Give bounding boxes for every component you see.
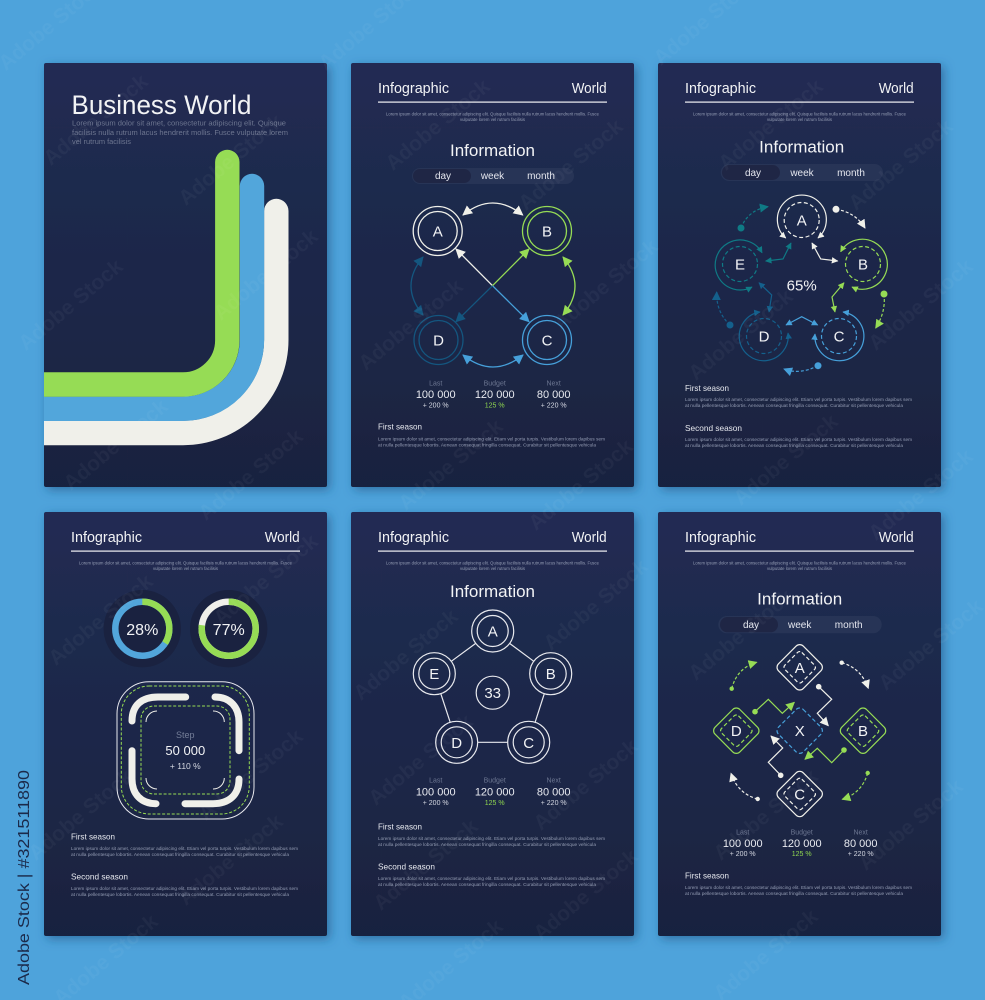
- second season text: [378, 862, 606, 887]
- diamond A: A: [795, 660, 805, 677]
- diamond B: B: [858, 723, 868, 740]
- watermarks: Adobe Stock: [549, 235, 663, 335]
- stats: Last: [736, 829, 749, 836]
- watermarks: Adobe Stock: [209, 530, 323, 630]
- second season text: Second season: [71, 872, 128, 882]
- diamond D: D: [731, 723, 742, 740]
- node A: [413, 206, 462, 256]
- stock id side text: Adobe Stock | #321511890: [16, 770, 33, 985]
- node C: [815, 312, 864, 361]
- watermarks: Adobe Stock: [524, 435, 638, 535]
- first season text: at nulla pellentesque lobortis. Aenean consequat fringilla consequat. Curabitur sit pellentesque vehicula: [685, 403, 904, 408]
- watermarks: Adobe Stock: [209, 225, 323, 325]
- stats: [416, 778, 571, 807]
- watermarks: Adobe Stock: [684, 585, 798, 685]
- watermarks: Adobe Stock: [874, 595, 985, 695]
- step frame: 50 000: [165, 743, 205, 758]
- stats: Next: [546, 381, 561, 388]
- node E: E: [735, 256, 745, 274]
- curved colour bands: [20, 162, 276, 433]
- diamond A: [775, 643, 824, 692]
- stats: 100 000: [416, 787, 456, 799]
- stats: + 220 %: [848, 851, 874, 858]
- step frame: Step: [176, 730, 195, 740]
- page header: World: [879, 81, 914, 97]
- diamond C: [775, 769, 824, 819]
- stats: 100 000: [416, 389, 456, 401]
- watermarks: Adobe Stock: [369, 815, 483, 915]
- outer dashed arrows: [717, 206, 888, 371]
- cover text block: Lorem ipsum dolor sit amet, consectetur adipiscing elit. Quisque: [72, 120, 286, 128]
- stats: + 200 %: [730, 851, 756, 858]
- page header: Infographic: [378, 530, 449, 546]
- second season text: at nulla pellentesque lobortis. Aenean consequat fringilla consequat. Curabitur sit pellentesque vehicula: [685, 443, 904, 448]
- cover text block: [72, 120, 288, 146]
- node C: C: [523, 735, 534, 752]
- stats: 120 000: [475, 389, 515, 401]
- first season text: at nulla pellentesque lobortis. Aenean consequat fringilla consequat. Curabitur sit pellentesque vehicula: [71, 852, 290, 857]
- watermarks: Adobe Stock: [684, 285, 798, 385]
- stats: 80 000: [537, 787, 571, 799]
- watermarks: Adobe Stock: [729, 410, 843, 510]
- watermarks: Adobe Stock: [709, 765, 823, 865]
- first season text: at nulla pellentesque lobortis. Aenean consequat fringilla consequat. Curabitur sit pellentesque vehicula: [685, 891, 904, 896]
- diamond D: [712, 706, 761, 755]
- node D: D: [433, 332, 444, 350]
- second season text: at nulla pellentesque lobortis. Aenean consequat fringilla consequat. Curabitur sit pellentesque vehicula: [71, 892, 290, 897]
- node B: B: [858, 256, 868, 274]
- day week month tabs: week: [787, 620, 812, 631]
- cover text block: vel rutrum facilisis: [72, 139, 132, 146]
- page header: [71, 530, 300, 571]
- donut 77%: 77%: [213, 622, 245, 639]
- day week month tabs: [412, 168, 574, 184]
- first season text: Lorem ipsum dolor sit amet, consectetur adipiscing elit. Etiam vel porta turpis. Vestibulum lorem dapibus sem: [685, 885, 913, 890]
- node D: [436, 721, 478, 763]
- watermarks: Adobe Stock: [14, 255, 128, 355]
- stats: 125 %: [792, 851, 812, 858]
- watermarks: Adobe Stock: [39, 70, 153, 170]
- stats: 120 000: [782, 838, 822, 850]
- first season text: First season: [71, 832, 115, 842]
- node B: [841, 239, 887, 289]
- second season text: Lorem ipsum dolor sit amet, consectetur adipiscing elit. Etiam vel porta turpis. Vestibulum lorem dapibus sem: [378, 876, 606, 881]
- heading: Information: [759, 138, 844, 157]
- watermarks: Adobe Stock: [394, 415, 508, 515]
- first season text: at nulla pellentesque lobortis. Aenean consequat fringilla consequat. Curabitur sit pellentesque vehicula: [378, 842, 597, 847]
- page header: [378, 81, 607, 122]
- watermarks: Adobe Stock: [349, 605, 463, 705]
- donut 77%: [190, 590, 267, 667]
- node D: [739, 312, 788, 361]
- page header: Lorem ipsum dolor sit amet, consectetur adipiscing elit. Quisque facilisis nulla rutrum lacus hendrerit mollis. Fusce: [386, 112, 600, 116]
- stats: 125 %: [485, 403, 505, 410]
- donut 28%: [104, 590, 181, 667]
- watermarks: Adobe Stock: [864, 445, 978, 545]
- step frame: [117, 682, 254, 819]
- page header: vulputate lorem vel rutrum facilisis: [153, 566, 218, 571]
- first season text: [71, 832, 299, 857]
- stats: Budget: [484, 381, 506, 388]
- node A: A: [433, 224, 443, 240]
- day week month tabs: day: [745, 168, 761, 179]
- first season text: First season: [685, 870, 729, 880]
- node C: [508, 721, 550, 763]
- node A: A: [488, 624, 498, 640]
- day week month tabs: week: [789, 168, 815, 179]
- watermarks: Adobe Stock: [174, 110, 288, 210]
- day week month tabs: month: [527, 171, 555, 182]
- page header: [378, 530, 607, 571]
- arrows between circles: [411, 203, 575, 367]
- page header: Infographic: [71, 530, 142, 546]
- stats: 80 000: [537, 389, 571, 401]
- panel: cover Business World: [20, 63, 327, 487]
- panel: diamond diagram: [658, 512, 941, 936]
- stats: Next: [546, 778, 561, 785]
- stats: + 220 %: [541, 403, 567, 410]
- day week month tabs: week: [480, 171, 505, 182]
- node B: [522, 206, 572, 256]
- stats: [416, 381, 571, 410]
- outer dashed arrows: [730, 660, 870, 801]
- diamond X: X: [795, 723, 805, 740]
- cover text block: facilisis nulla rutrum lacus hendrerit mollis. Fusce vulputate lorem: [72, 130, 288, 137]
- panel: pentagon diagram: [351, 512, 634, 936]
- stats: 100 000: [723, 838, 763, 850]
- page header: [685, 530, 914, 571]
- centre percentage: 65%: [787, 278, 817, 294]
- page header: Infographic: [378, 81, 449, 97]
- node C: [522, 316, 572, 364]
- cover title: Business World: [72, 90, 252, 120]
- watermarks: Adobe Stock: [529, 845, 643, 945]
- diamond X: [775, 706, 824, 755]
- node E: [413, 653, 455, 695]
- first season text: Lorem ipsum dolor sit amet, consectetur adipiscing elit. Etiam vel porta turpis. Vestibulum lorem dapibus sem: [71, 846, 299, 851]
- watermarks: Adobe Stock: [381, 75, 495, 175]
- second season text: [71, 872, 299, 897]
- stats: + 200 %: [423, 800, 449, 807]
- step frame: + 110 %: [170, 761, 201, 771]
- node E: [715, 240, 762, 290]
- page header: vulputate lorem vel rutrum facilisis: [460, 117, 525, 122]
- first season text: First season: [378, 822, 422, 832]
- page header: World: [572, 81, 607, 97]
- watermarks: Adobe Stock: [354, 275, 468, 375]
- stats: 120 000: [475, 787, 515, 799]
- node C: C: [834, 328, 845, 346]
- first season text: First season: [378, 422, 422, 432]
- page header: Infographic: [685, 530, 756, 546]
- page header: Lorem ipsum dolor sit amet, consectetur adipiscing elit. Quisque facilisis nulla rutrum lacus hendrerit mollis. Fusce: [386, 560, 600, 566]
- page header: Infographic: [685, 81, 756, 97]
- first season text: at nulla pellentesque lobortis. Aenean consequat fringilla consequat. Curabitur sit pellentesque vehicula: [378, 443, 597, 448]
- first season text: Lorem ipsum dolor sit amet, consectetur adipiscing elit. Etiam vel porta turpis. Vestibulum lorem dapibus sem: [685, 397, 913, 402]
- first season text: [378, 422, 606, 448]
- second season text: Second season: [685, 423, 742, 433]
- node B: [530, 653, 572, 695]
- first season text: [685, 870, 913, 896]
- day week month tabs: month: [835, 620, 863, 631]
- pentagon links: [441, 643, 544, 742]
- second season text: Lorem ipsum dolor sit amet, consectetur adipiscing elit. Etiam vel porta turpis. Vestibulum lorem dapibus sem: [685, 437, 913, 442]
- node D: D: [759, 328, 770, 346]
- panel: five circle cycle: [658, 63, 941, 487]
- watermarks: Adobe Stock: [194, 425, 308, 525]
- page header: Lorem ipsum dolor sit amet, consectetur adipiscing elit. Quisque facilisis nulla rutrum lacus hendrerit mollis. Fusce: [79, 560, 293, 566]
- first season text: Lorem ipsum dolor sit amet, consectetur adipiscing elit. Etiam vel porta turpis. Vestibulum lorem dapibus sem: [378, 836, 606, 841]
- node B: B: [542, 224, 552, 240]
- heading: Information: [450, 582, 535, 601]
- stats: Next: [853, 829, 868, 836]
- first season text: [378, 822, 606, 847]
- node B: B: [546, 666, 556, 683]
- node D: D: [451, 735, 462, 752]
- panel: donuts and step frame: [44, 512, 327, 936]
- second season text: [685, 423, 913, 448]
- watermarks: Adobe Stock: [714, 75, 828, 175]
- page header: vulputate lorem vel rutrum facilisis: [767, 566, 832, 571]
- panel: four circle diagram: [351, 63, 634, 487]
- watermarks: Adobe Stock: [364, 710, 478, 810]
- day week month tabs: day: [743, 620, 759, 631]
- node C: C: [542, 332, 553, 350]
- second season text: Lorem ipsum dolor sit amet, consectetur adipiscing elit. Etiam vel porta turpis. Vestibulum lorem dapibus sem: [71, 886, 299, 891]
- stats: 125 %: [485, 800, 505, 807]
- stats: Last: [429, 381, 442, 388]
- page header: vulputate lorem vel rutrum facilisis: [460, 566, 525, 571]
- watermarks: Adobe Stock: [194, 725, 308, 825]
- stats: + 220 %: [541, 800, 567, 807]
- page header: World: [572, 530, 607, 546]
- page header: [685, 81, 914, 122]
- stats: Budget: [791, 829, 813, 836]
- node A: A: [797, 212, 807, 230]
- centre value: [476, 676, 509, 709]
- page header: vulputate lorem vel rutrum facilisis: [767, 117, 832, 122]
- day week month tabs: day: [435, 171, 451, 182]
- heading: Information: [450, 141, 535, 160]
- second season text: Second season: [378, 862, 435, 872]
- page header: Lorem ipsum dolor sit amet, consectetur adipiscing elit. Quisque facilisis nulla rutrum lacus hendrerit mollis. Fusce: [693, 112, 907, 116]
- watermarks: Adobe Stock: [59, 395, 173, 495]
- stats: [723, 829, 878, 858]
- heading: Information: [757, 589, 842, 608]
- day week month tabs: month: [837, 168, 865, 179]
- first season text: First season: [685, 383, 729, 393]
- day week month tabs: [721, 164, 883, 181]
- watermarks: Adobe Stock: [529, 735, 643, 835]
- stats: + 200 %: [423, 403, 449, 410]
- watermarks: Adobe Stock: [864, 255, 978, 355]
- day week month tabs: [718, 616, 882, 633]
- page header: Lorem ipsum dolor sit amet, consectetur adipiscing elit. Quisque facilisis nulla rutrum lacus hendrerit mollis. Fusce: [693, 560, 907, 566]
- second season text: at nulla pellentesque lobortis. Aenean consequat fringilla consequat. Curabitur sit pellentesque vehicula: [378, 882, 597, 887]
- diamond B: [838, 706, 888, 755]
- watermarks: Adobe Stock: [539, 555, 653, 655]
- node E: E: [429, 666, 439, 683]
- node A: [472, 610, 514, 652]
- watermarks: Adobe Stock: [844, 115, 958, 215]
- first season text: [685, 383, 913, 408]
- node A: [777, 195, 826, 238]
- page header: World: [879, 530, 914, 546]
- watermarks: Adobe Stock: [44, 570, 158, 670]
- node D: [414, 316, 463, 364]
- diamond C: C: [794, 786, 805, 804]
- stats: Last: [429, 778, 442, 785]
- page header: World: [265, 530, 300, 546]
- stats: 80 000: [844, 838, 878, 850]
- zigzag arrows: [752, 684, 847, 778]
- donut 28%: 28%: [126, 622, 158, 639]
- watermarks: Adobe Stock: [174, 810, 288, 910]
- watermarks: Adobe Stock: [24, 765, 138, 865]
- inner link arrows: [759, 243, 844, 325]
- stats: Budget: [484, 778, 506, 785]
- first season text: Lorem ipsum dolor sit amet, consectetur adipiscing elit. Etiam vel porta turpis. Vestibulum lorem dapibus sem: [378, 437, 606, 442]
- centre value: 33: [484, 685, 501, 702]
- watermarks: Adobe Stock: [514, 115, 628, 215]
- watermarks: Adobe Stock: [854, 775, 968, 875]
